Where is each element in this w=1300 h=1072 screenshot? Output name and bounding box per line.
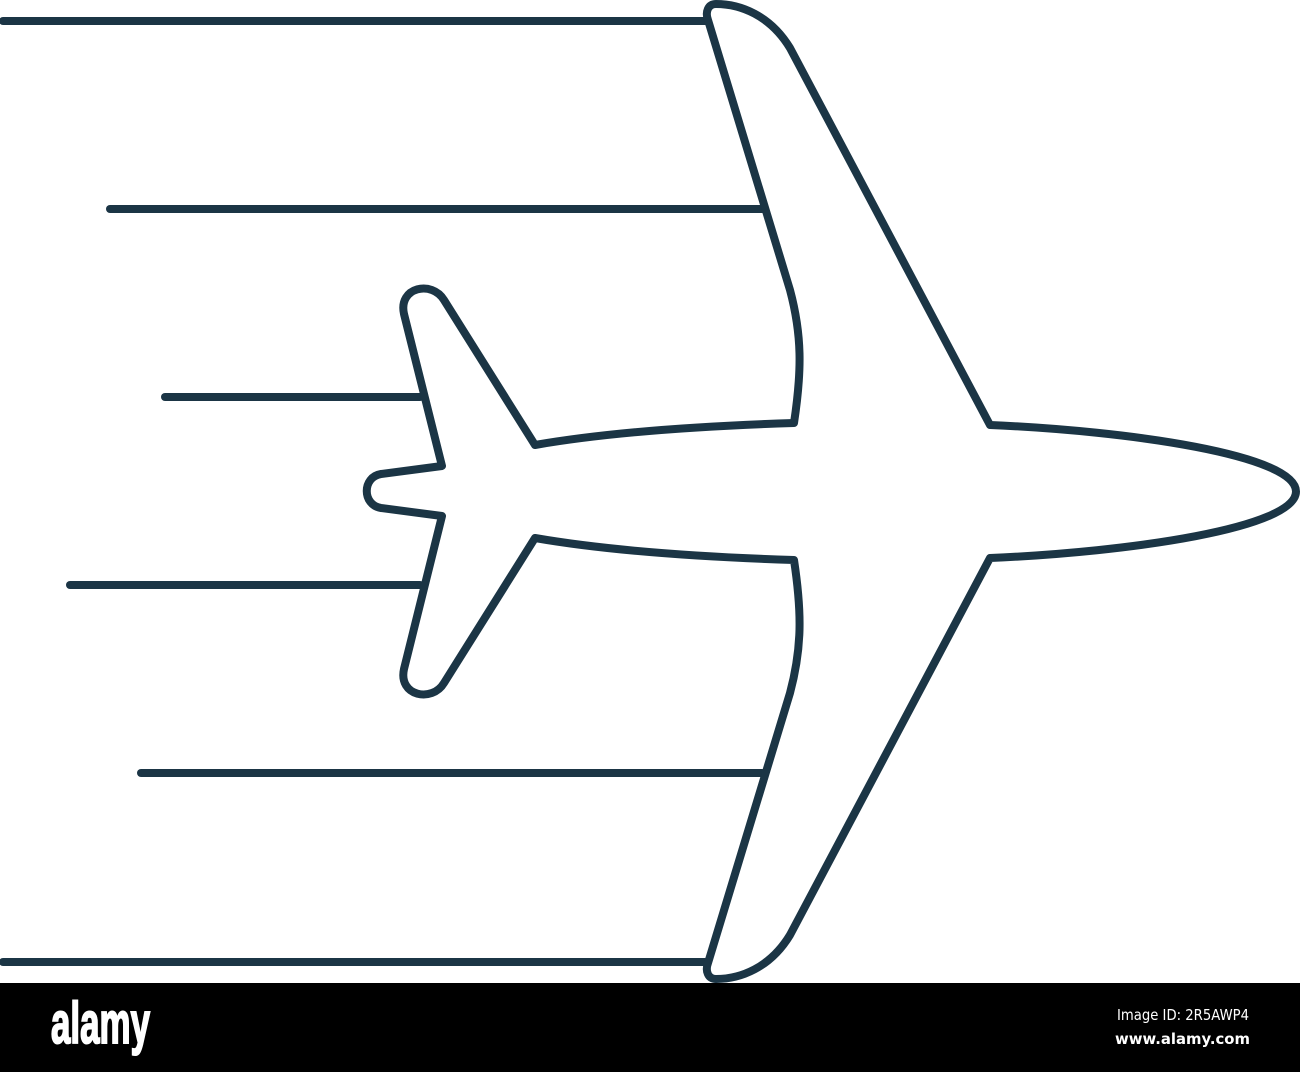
footer bar xyxy=(0,983,1300,1072)
image id: Image ID: 2R5AWP4 xyxy=(1117,1006,1249,1024)
speed lines xyxy=(3,21,762,962)
website: www.alamy.com xyxy=(1115,1030,1250,1048)
icon: airplane outline xyxy=(367,4,1296,979)
logo: alamy: alamy xyxy=(51,991,150,1056)
